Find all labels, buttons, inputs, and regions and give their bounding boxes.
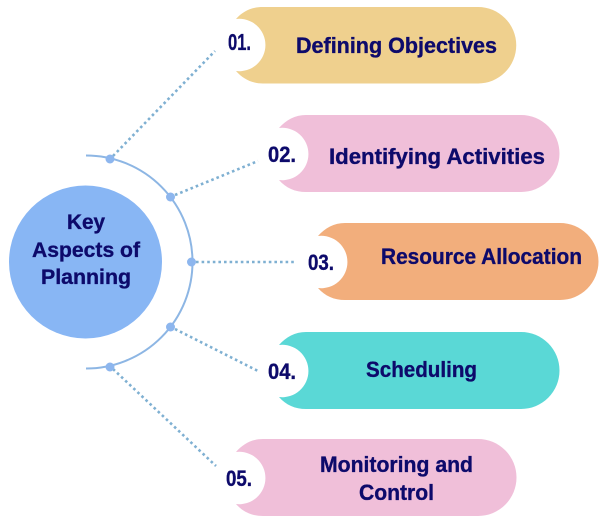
- item 02: Identifying Activities: Identifying Activities: [329, 144, 545, 169]
- connector 05: [106, 362, 216, 466]
- central circle label: Planning: [41, 266, 131, 289]
- item 05: Monitoring and Control: 05.: [226, 466, 252, 491]
- item 03: Resource Allocation: Resource Allocation: [381, 244, 582, 269]
- central circle: [9, 186, 162, 338]
- item 02: Identifying Activities: 02.: [268, 142, 296, 167]
- item 05: Monitoring and Control: [226, 439, 516, 516]
- item 04: Scheduling: 04.: [268, 359, 296, 384]
- item 04: Scheduling: [268, 332, 560, 409]
- item 03: Resource Allocation: 03.: [308, 250, 334, 275]
- item 03: Resource Allocation: [308, 223, 598, 300]
- item 05: Monitoring and Control: Control: [359, 480, 434, 505]
- item 02: Identifying Activities: [268, 115, 559, 192]
- connector 03: [187, 258, 294, 266]
- item 04: Scheduling: Scheduling: [366, 357, 477, 382]
- connector 04: [166, 322, 258, 371]
- central circle label: Key: [67, 211, 105, 234]
- central circle label: Aspects of: [32, 239, 141, 262]
- central circle label: [32, 211, 141, 289]
- item 01: Defining Objectives: 01.: [228, 29, 251, 55]
- connector arc: [86, 156, 192, 368]
- connector 01: [106, 51, 215, 164]
- connector 02: [166, 161, 258, 202]
- item 01: Defining Objectives: Defining Objectives: [296, 33, 497, 58]
- item 05: Monitoring and Control: Monitoring and: [320, 452, 473, 477]
- item 01: Defining Objectives: [228, 7, 516, 84]
